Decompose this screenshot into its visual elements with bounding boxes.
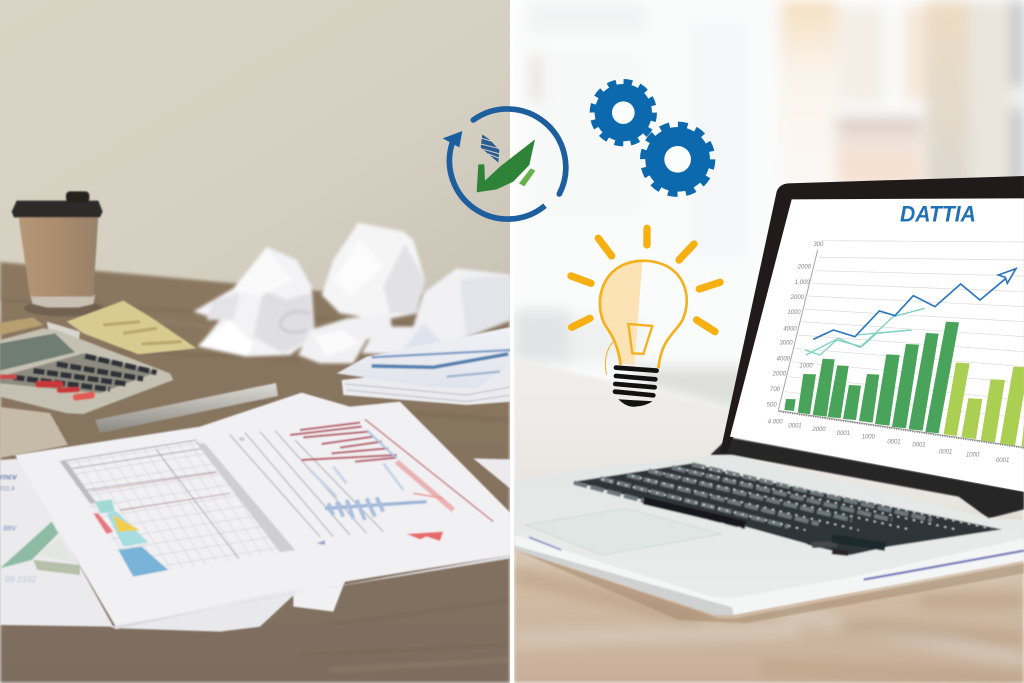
- teal lines: [805, 308, 925, 355]
- axis labels: 3000: [779, 340, 793, 346]
- spreadsheet grid: [60, 440, 295, 577]
- right panel: bright office with laptop: [512, 0, 1024, 683]
- axis labels: 0001: [996, 458, 1009, 464]
- axis: [778, 250, 1024, 447]
- main spreadsheet sheet: [15, 393, 511, 628]
- wall: [0, 0, 510, 300]
- yellow sticky notes: [0, 301, 197, 354]
- lower gear: [643, 125, 712, 194]
- calculator: [0, 322, 173, 414]
- coffee cup: [12, 191, 103, 316]
- bulb fill: [601, 262, 642, 366]
- laptop screen: [720, 176, 1024, 492]
- bulb outline: [600, 261, 687, 368]
- filament: [628, 324, 652, 354]
- axis labels: 1000: [799, 363, 813, 369]
- left panel: cluttered desk: [0, 0, 512, 683]
- left glow line: [605, 342, 613, 375]
- axis labels: 0001: [939, 449, 952, 455]
- scattered chart sheets: [0, 393, 512, 632]
- axis labels: [767, 242, 1009, 464]
- axis labels: 2000: [772, 371, 787, 377]
- side chart on back sheet: 88V: [3, 524, 17, 533]
- bezel: [720, 176, 1024, 490]
- axis labels: 4000: [783, 326, 797, 332]
- title: DATTIA: [900, 201, 976, 226]
- screw base: [615, 368, 657, 407]
- side chart on back sheet: 011.4: [0, 487, 15, 493]
- wooden desk: [0, 262, 510, 683]
- axis labels: 0001: [788, 423, 802, 429]
- trackpad: [525, 508, 722, 555]
- cycle check icon: [443, 109, 566, 219]
- axis labels: 500: [767, 403, 777, 409]
- axis labels: 2000: [797, 264, 812, 270]
- silver pen: [95, 383, 278, 433]
- axis labels: 300: [813, 242, 824, 248]
- keyboard: [574, 463, 1002, 555]
- blurred windows: [514, 0, 1024, 420]
- axis labels: 4000: [777, 356, 791, 362]
- small green dash: [519, 168, 535, 186]
- axis labels: 1000: [966, 453, 980, 459]
- axis labels: 1,000: [795, 280, 810, 286]
- stone tile under pen: [0, 407, 68, 458]
- crumpled paper balls: [193, 223, 512, 363]
- axis labels: 4 000: [768, 419, 783, 425]
- side chart on back sheet: rncv: [0, 472, 17, 481]
- green bars: [784, 322, 959, 433]
- cycle arrow: [443, 109, 566, 219]
- axis labels: 0001: [912, 443, 926, 449]
- lightbulb icon: [571, 228, 720, 407]
- axis labels: 1000: [862, 435, 876, 441]
- hinge: [710, 437, 1024, 518]
- striped diamond: [481, 134, 500, 163]
- grid lines: [785, 241, 1024, 418]
- axis labels: 1000: [787, 310, 801, 316]
- side chart on back sheet: 09 2102: [5, 574, 36, 584]
- axis labels: 0001: [887, 439, 901, 445]
- upper gear: [593, 82, 654, 143]
- gears icon: [593, 82, 712, 194]
- side chart on back sheet: [0, 472, 80, 584]
- wood grain: [514, 570, 1024, 678]
- green check leaf: [477, 139, 535, 192]
- table top: [514, 358, 1024, 683]
- lime bars: [944, 363, 1024, 447]
- axis labels: 2000: [811, 427, 826, 433]
- gantt chart: 90: [239, 437, 245, 442]
- axis labels: 2000: [790, 295, 805, 301]
- stack of papers: [337, 327, 512, 405]
- laptop base: [512, 437, 1024, 623]
- blue trend line with arrow: [813, 269, 1016, 339]
- axis labels: 0001: [837, 431, 850, 437]
- rays: [571, 228, 720, 332]
- gantt chart: [230, 419, 493, 545]
- axis labels: 700: [770, 387, 781, 393]
